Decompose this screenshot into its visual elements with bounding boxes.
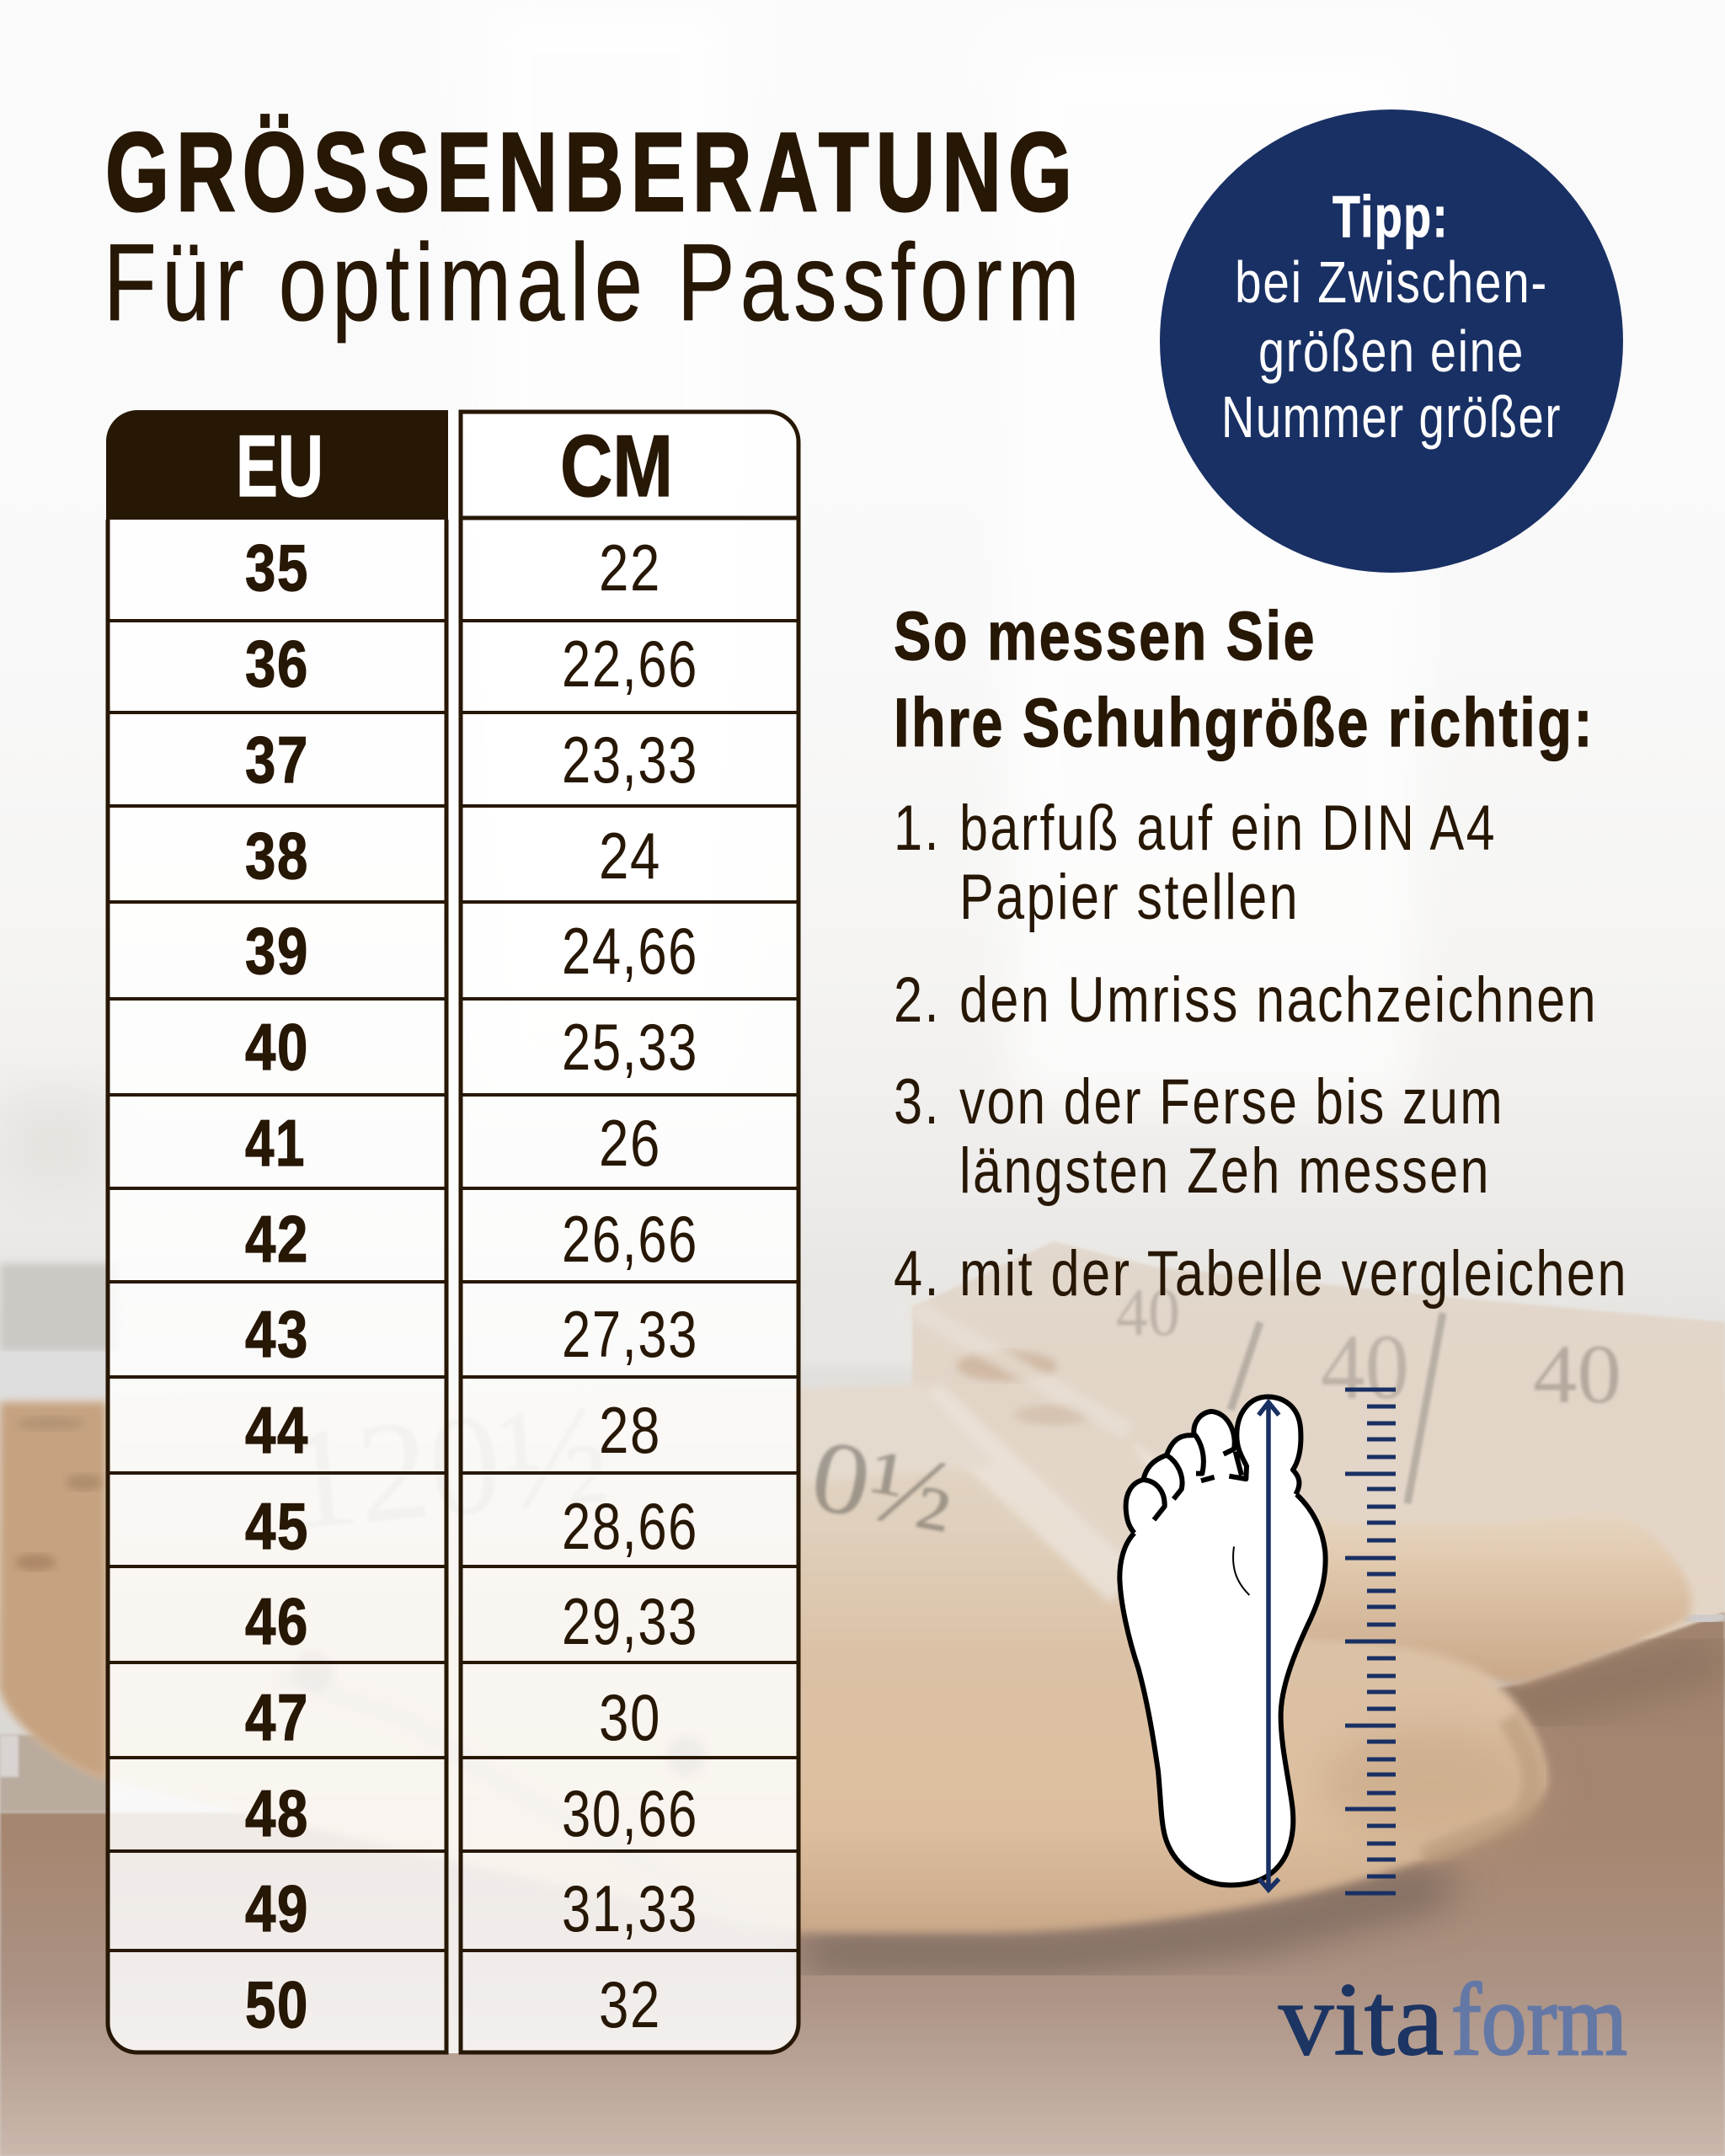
column: EU: 38 — [245, 819, 309, 893]
column: EU: 36 — [245, 627, 309, 701]
instruction list: Papier stellen — [959, 862, 1300, 933]
column: EU: 44 — [245, 1393, 309, 1467]
tip badge: bei Zwischen- — [1235, 249, 1548, 315]
instruction list: von der Ferse bis zum — [959, 1066, 1504, 1138]
title — [104, 110, 1085, 344]
column: EU: 50 — [245, 1967, 309, 2041]
logo: vitaform: vita — [1279, 1961, 1444, 2077]
column: CM — [461, 412, 798, 2052]
column: EU: 42 — [245, 1202, 309, 1276]
size table — [106, 410, 800, 2053]
column: EU: EU — [236, 418, 323, 515]
column: EU: 39 — [245, 914, 309, 988]
last size stamps: 40 — [1321, 1315, 1409, 1418]
column: CM: 30 — [599, 1680, 661, 1754]
column: CM: 26 — [599, 1106, 661, 1180]
tip badge: Tipp: — [1332, 184, 1449, 249]
column: CM: 25,33 — [562, 1010, 698, 1084]
column: CM: 23,33 — [562, 723, 698, 797]
instruction list: 3. — [894, 1066, 941, 1138]
column: EU: 35 — [245, 531, 309, 605]
column: CM: 31,33 — [562, 1871, 698, 1945]
instruction list: 1. — [894, 792, 941, 864]
column: CM: 28 — [599, 1393, 661, 1467]
column: CM: 30,66 — [562, 1776, 698, 1850]
upper last — [912, 1241, 1725, 1651]
instruction list: 4. — [894, 1238, 941, 1310]
tip badge: größen eine — [1258, 318, 1525, 384]
last size stamps: 120½ — [280, 1374, 614, 1560]
column: EU: 48 — [245, 1776, 309, 1850]
logo: vitaform — [1279, 1961, 1627, 2077]
column: CM: 24,66 — [562, 914, 698, 988]
column: CM: 24 — [599, 819, 661, 893]
main last — [0, 1385, 1546, 1933]
heading: how to measure: So messen Sie — [894, 598, 1316, 675]
tip badge — [1160, 109, 1623, 573]
column: CM: 22 — [599, 531, 661, 605]
floor — [0, 1613, 1725, 2156]
column: CM: 26,66 — [562, 1202, 698, 1276]
instruction list: barfuß auf ein DIN A4 — [959, 792, 1497, 864]
last size stamps: 40 — [1533, 1327, 1621, 1421]
column: CM: CM — [560, 418, 673, 515]
last size stamps: 40 — [1116, 1276, 1180, 1350]
left wood — [0, 1402, 106, 1779]
column: CM: 27,33 — [562, 1297, 698, 1371]
instruction list: längsten Zeh messen — [959, 1135, 1491, 1207]
column: EU: 49 — [245, 1871, 309, 1945]
column: CM: 28,66 — [562, 1489, 698, 1563]
column: CM: 32 — [599, 1967, 661, 2041]
icon: ruler scale — [1345, 1390, 1396, 1893]
column: EU — [106, 410, 448, 2052]
column: EU: 41 — [245, 1106, 306, 1180]
instruction list — [894, 792, 1628, 1310]
icon: foot with measuring arrow — [1119, 1397, 1326, 1890]
title: GRÖSSENBERATUNG — [105, 110, 1079, 235]
heading: how to measure — [894, 598, 1594, 761]
column: EU: 37 — [245, 723, 309, 797]
last size stamps: 0½ — [803, 1418, 964, 1555]
column: EU: 45 — [245, 1489, 309, 1563]
column: EU: 43 — [245, 1297, 309, 1371]
instruction list: 2. — [894, 964, 941, 1036]
column: EU: 40 — [245, 1010, 309, 1084]
column: EU: 46 — [245, 1584, 309, 1658]
title: Für optimale Passform — [104, 221, 1085, 344]
column: EU: 47 — [245, 1680, 309, 1754]
column: CM: 29,33 — [562, 1584, 698, 1658]
logo: vitaform: form — [1451, 1963, 1627, 2077]
tip badge: Nummer größer — [1221, 384, 1562, 450]
column: CM: 22,66 — [562, 627, 698, 701]
toe of upper last — [1130, 1441, 1691, 1684]
last size stamps — [280, 1276, 1621, 1560]
